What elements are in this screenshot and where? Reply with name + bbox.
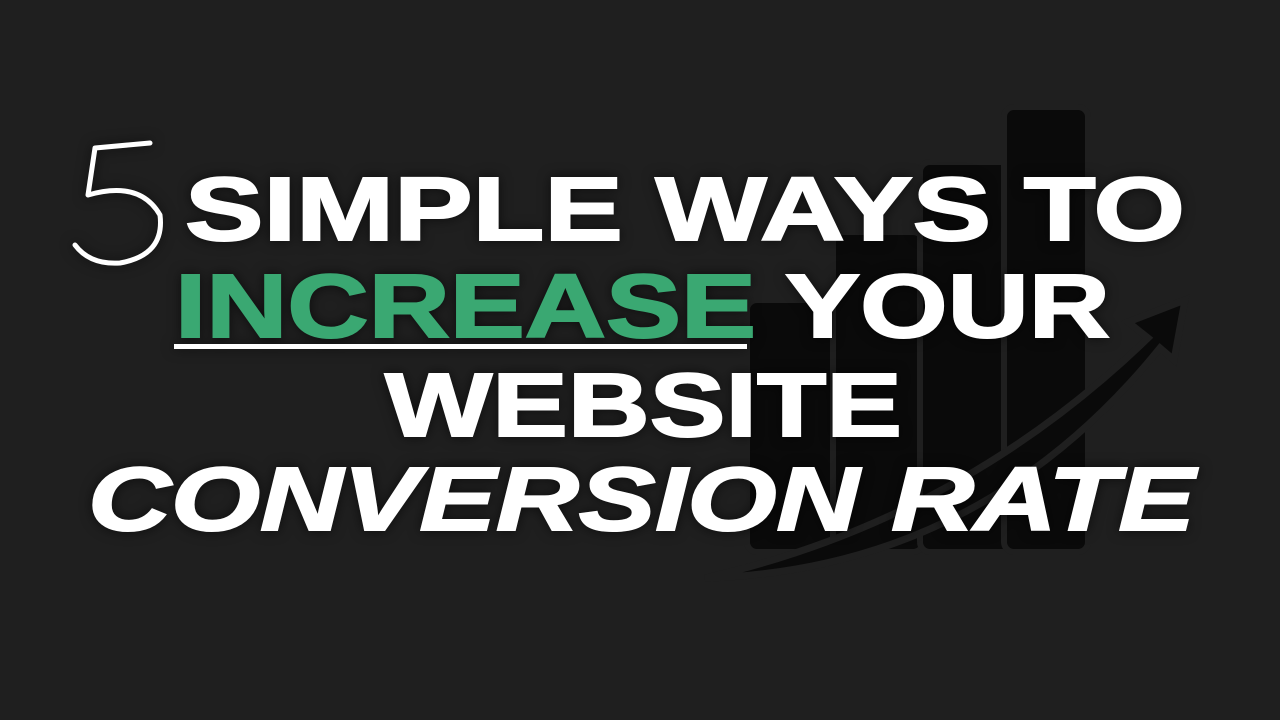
icon: handwritten 5: [75, 143, 160, 263]
title: [75, 143, 1199, 550]
background chart: [705, 107, 1185, 578]
title line 3: WEBSITE: [385, 356, 902, 456]
title line 1: SIMPLE WAYS TO: [185, 160, 1185, 260]
title line 4: CONVERSION RATE: [88, 450, 1199, 550]
title line 2: INCREASE YOUR: [175, 257, 1110, 357]
